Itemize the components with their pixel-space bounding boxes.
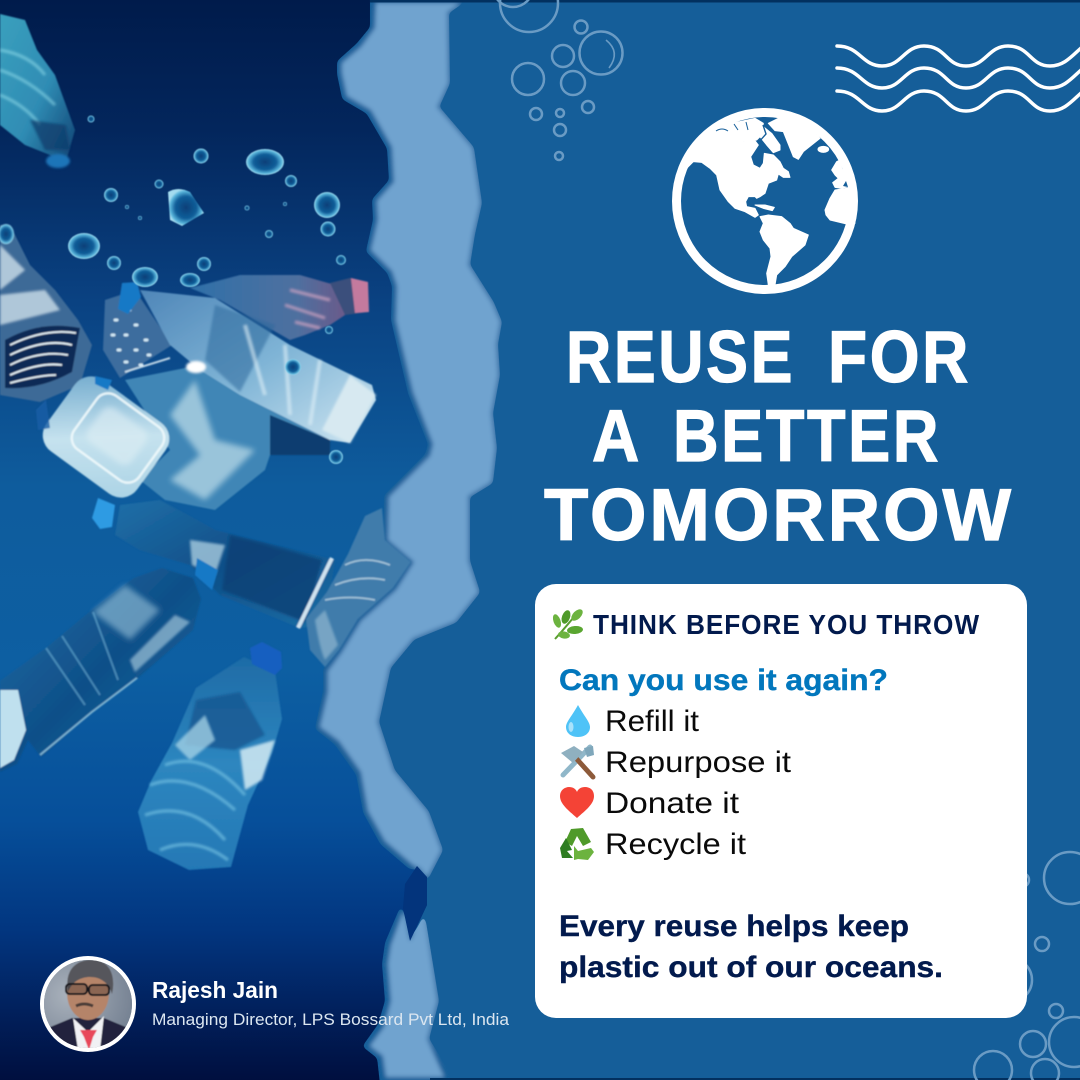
bottle: behind middle streaky bbox=[125, 365, 330, 510]
title: BETTER bbox=[673, 396, 941, 477]
bottle: top left teal bbox=[0, 14, 75, 168]
icon: herb bbox=[551, 607, 585, 639]
closing message bbox=[559, 910, 943, 984]
bottle: back pink-capped bbox=[190, 275, 369, 340]
bottle: big diagonal left bbox=[0, 568, 201, 772]
portrait bbox=[40, 958, 136, 1050]
water bubbles bbox=[68, 116, 346, 464]
icon: globe bbox=[676, 112, 855, 290]
title: FOR bbox=[828, 317, 971, 398]
card: think before you throw bbox=[535, 584, 1027, 1018]
closing message: plastic out of our oceans. bbox=[559, 951, 943, 984]
list item: repurpose: Repurpose it bbox=[605, 746, 792, 779]
dark notch bbox=[403, 866, 427, 941]
torn paper strip bbox=[317, 0, 500, 1080]
icon: water drop bbox=[566, 705, 590, 737]
thin dark strips at top and bottom edge bbox=[370, 0, 1080, 1080]
closing message: Every reuse helps keep bbox=[559, 910, 909, 943]
icon: heart bbox=[560, 787, 594, 818]
bottle: lower with bright cap bbox=[92, 498, 335, 628]
author role: Managing Director, LPS Bossard Pvt Ltd, India bbox=[152, 1011, 510, 1029]
title: TOMORROW bbox=[544, 475, 1014, 556]
title: REUSE bbox=[566, 317, 795, 398]
title: A bbox=[592, 396, 642, 477]
bottle: fragment on torn edge bbox=[306, 508, 411, 667]
decorative bubbles bottom right bbox=[974, 852, 1080, 1080]
bottle: front clear with blue cap bbox=[118, 282, 376, 443]
list item: donate: Donate it bbox=[605, 787, 740, 820]
bottle: left ribbed silver bbox=[0, 224, 92, 402]
list item: refill: Refill it bbox=[605, 705, 700, 738]
card heading: THINK BEFORE YOU THROW bbox=[593, 609, 980, 640]
card question: Can you use it again? bbox=[559, 664, 888, 697]
bottle: short icy bottom bbox=[35, 368, 177, 506]
bottle: centre crushed bbox=[138, 642, 282, 870]
bottles group bbox=[0, 14, 411, 870]
ocean photo panel bbox=[0, 0, 430, 1080]
wave lines bbox=[837, 46, 1080, 111]
list item: recycle: Recycle it bbox=[605, 828, 747, 861]
decorative bubbles top bbox=[493, 0, 622, 160]
bottle: back bubbly bbox=[103, 290, 172, 378]
icon: recycle bbox=[560, 828, 594, 860]
title bbox=[544, 317, 1014, 556]
author name: Rajesh Jain bbox=[152, 977, 278, 1003]
icon: hammer and wrench bbox=[561, 746, 594, 777]
